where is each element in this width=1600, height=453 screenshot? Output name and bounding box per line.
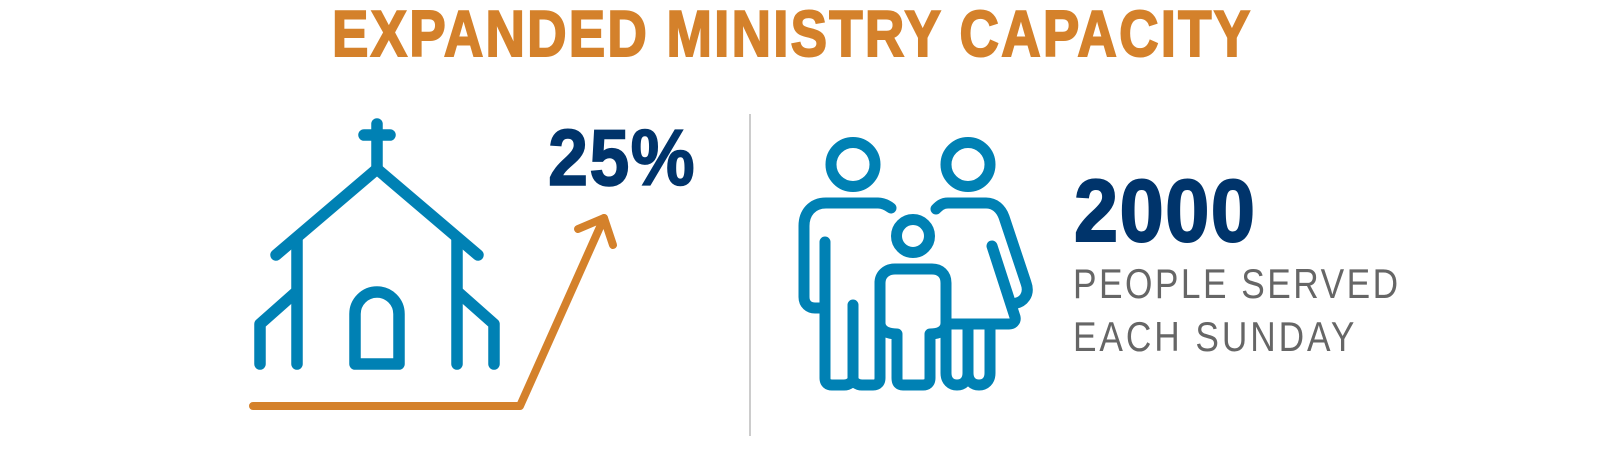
divider: [750, 114, 751, 436]
man: [804, 142, 891, 385]
woman: [936, 142, 1027, 385]
stat: 2000: 2000: [1074, 161, 1255, 260]
arrow: growth: [253, 218, 613, 406]
label: people served: PEOPLE SERVED: [1073, 261, 1398, 308]
child: [880, 220, 946, 385]
stat: 25%: 25%: [548, 114, 695, 203]
icon: family: [804, 142, 1027, 385]
label: each sunday: EACH SUNDAY: [1073, 314, 1354, 361]
icon: church: [260, 124, 494, 364]
